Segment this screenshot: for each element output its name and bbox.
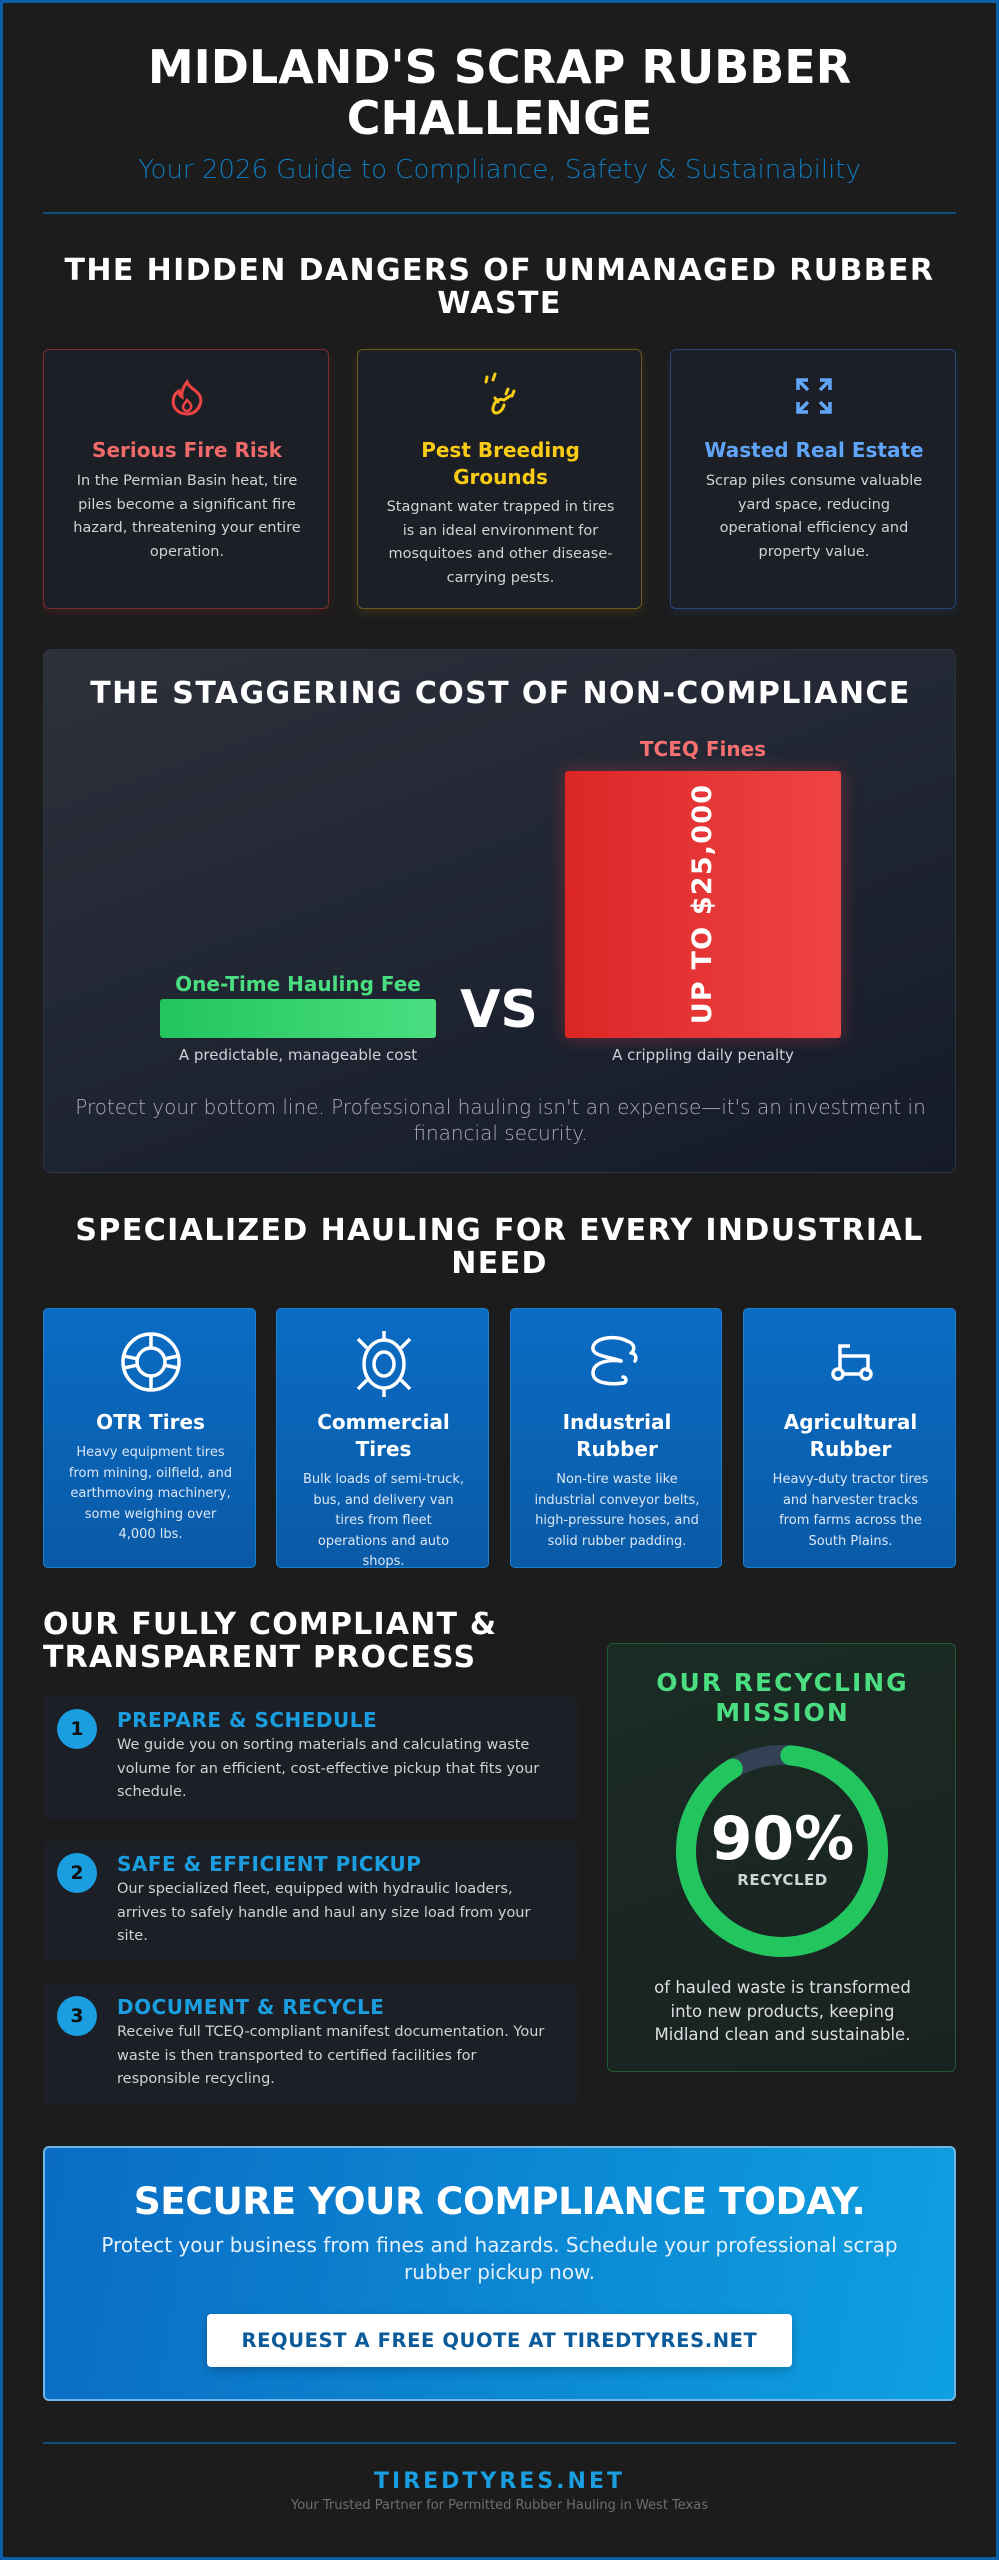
bar: hauling xyxy=(160,999,436,1038)
text: from farms across the South Plains. xyxy=(779,1513,922,1548)
icon: mosquito xyxy=(484,372,516,414)
step 2 xyxy=(43,1841,578,1961)
card: OTR xyxy=(43,1308,256,1568)
heading: specialized: NEED xyxy=(451,1246,548,1281)
text: of hauled waste is transformed into new products, keeping Midland clean and sustainable. xyxy=(654,1978,911,2044)
title xyxy=(563,1410,671,1461)
heading: specialized xyxy=(75,1213,924,1281)
step 3: DOCUMENT & RECYCLE xyxy=(117,1995,384,2019)
text: Non-tire waste like industrial conveyor belts, high-pressure hoses, and solid rubber padding. xyxy=(535,1472,699,1548)
card text: Scrap piles consume valuable yard space, reducing operational efficiency and property value. xyxy=(706,473,922,560)
heading: hidden dangers xyxy=(64,253,934,321)
step 1 xyxy=(43,1696,578,1819)
card title: Serious Fire Risk xyxy=(92,438,282,462)
card title: Grounds xyxy=(453,465,548,489)
heading: MISSION xyxy=(715,1698,850,1727)
step 2: 2 xyxy=(70,1862,84,1884)
button: REQUEST A FREE QUOTE AT TIREDTYRES.NET xyxy=(242,2329,757,2352)
heading: hidden dangers: WASTE xyxy=(437,286,562,321)
card text: In the Permian Basin heat, tire piles become a significant fire hazard, threatening your entire operation. xyxy=(73,473,301,560)
card title: Pest Breeding xyxy=(421,438,580,462)
panel: cost of non-compliance xyxy=(43,649,956,1173)
icon: hose xyxy=(591,1336,638,1386)
heading xyxy=(656,1668,909,1727)
icon: fire xyxy=(172,378,202,416)
heading: process: OUR FULLY COMPLIANT & xyxy=(43,1607,497,1642)
card title xyxy=(421,438,580,489)
card: commercial xyxy=(276,1308,489,1568)
card: industrial xyxy=(510,1308,722,1568)
label: TCEQ: TCEQ Fines xyxy=(640,737,766,761)
step 2: Our specialized fleet, equipped with hydraulic loaders, arrives to safely handle and haul any size load from your site. xyxy=(117,1881,530,1944)
heading: THE STAGGERING COST OF NON-COMPLIANCE xyxy=(90,676,911,711)
panel: pests xyxy=(357,349,642,609)
heading: specialized: SPECIALIZED HAULING FOR EVERY INDUSTRIAL xyxy=(75,1213,924,1248)
footer tagline: Your Trusted Partner for Permitted Rubber Hauling in West Texas xyxy=(291,2498,708,2513)
title xyxy=(148,40,851,145)
title: MIDLAND'S SCRAP RUBBER xyxy=(148,40,851,94)
title xyxy=(784,1410,917,1461)
panel: fire risk xyxy=(43,349,329,609)
step 1: PREPARE & SCHEDULE xyxy=(117,1708,377,1732)
text: Heavy-duty tractor tires and harvester tracks xyxy=(773,1472,928,1508)
text: Heavy equipment tires from mining, oilfield, and earthmoving machinery, some weighing over xyxy=(69,1445,232,1522)
value: 90% xyxy=(711,1804,854,1874)
card title: Wasted Real Estate xyxy=(704,438,924,462)
step 1: 1 xyxy=(70,1718,84,1740)
icon: expand arrows xyxy=(796,378,832,414)
title: Tires xyxy=(356,1437,411,1461)
icon: tractor xyxy=(831,1344,873,1381)
bar text: UP TO $25,000 xyxy=(687,784,718,1024)
CTA panel xyxy=(43,2146,956,2401)
text xyxy=(773,1472,928,1548)
card: agricultural xyxy=(743,1308,956,1568)
title: Rubber xyxy=(810,1437,891,1461)
text: 4,000 lbs. xyxy=(118,1527,183,1542)
title: CHALLENGE xyxy=(347,91,652,145)
CTA heading: SECURE YOUR COMPLIANCE TODAY. xyxy=(134,2179,865,2223)
heading: process xyxy=(43,1607,497,1675)
CTA text: Protect your business from fines and hazards. Schedule your professional scrap rubber pickup now. xyxy=(101,2233,898,2284)
panel: cost of non-compliance: A crippling daily penalty xyxy=(612,1046,794,1064)
title: Industrial xyxy=(563,1410,671,1434)
step 2: SAFE & EFFICIENT PICKUP xyxy=(117,1852,421,1876)
step 3: 3 xyxy=(70,2005,84,2027)
captions: A predictable, manageable cost xyxy=(179,1046,417,1064)
title: Agricultural xyxy=(784,1410,917,1434)
donut chart xyxy=(676,1745,888,1957)
panel: recycling mission xyxy=(607,1643,956,2072)
text: Bulk loads of semi-truck, bus, and delivery van tires from fleet operations and auto shops. xyxy=(303,1472,464,1569)
heading: OUR RECYCLING xyxy=(656,1668,909,1697)
title: Commercial xyxy=(317,1410,450,1434)
bar: fines xyxy=(565,771,841,1038)
panel: real estate xyxy=(670,349,956,609)
step 1: We guide you on sorting materials and calculating waste volume for an efficient, cost-effective pickup that fits your schedule. xyxy=(117,1737,539,1800)
subtitle: Your 2026 Guide to Compliance, Safety & Sustainability xyxy=(138,155,861,185)
heading: process: TRANSPARENT PROCESS xyxy=(43,1640,476,1675)
title: Rubber xyxy=(576,1437,658,1461)
label: hauling fee: One-Time Hauling Fee xyxy=(175,972,421,996)
title: OTR Tires xyxy=(96,1410,205,1434)
VS: VS xyxy=(460,980,538,1040)
summary text: Protect your bottom line. Professional hauling isn't an expense—it's an investment in financial security. xyxy=(75,1095,926,1145)
step 3 xyxy=(43,1983,578,2105)
card text: Stagnant water trapped in tires is an ideal environment for mosquitoes and other disease-carrying pests. xyxy=(387,499,614,586)
icon: tire xyxy=(121,1332,181,1392)
panel: recycling mission: RECYCLED xyxy=(737,1871,828,1889)
heading: hidden dangers: THE HIDDEN DANGERS OF UNMANAGED RUBBER xyxy=(65,253,934,288)
button xyxy=(207,2314,792,2367)
footer brand: TIREDTYRES.NET xyxy=(374,2469,625,2494)
step 3: Receive full TCEQ-compliant manifest documentation. Your waste is then transported to certified facilities for responsible recycling. xyxy=(117,2024,544,2087)
icon: wheel xyxy=(356,1331,412,1397)
title xyxy=(317,1410,450,1461)
